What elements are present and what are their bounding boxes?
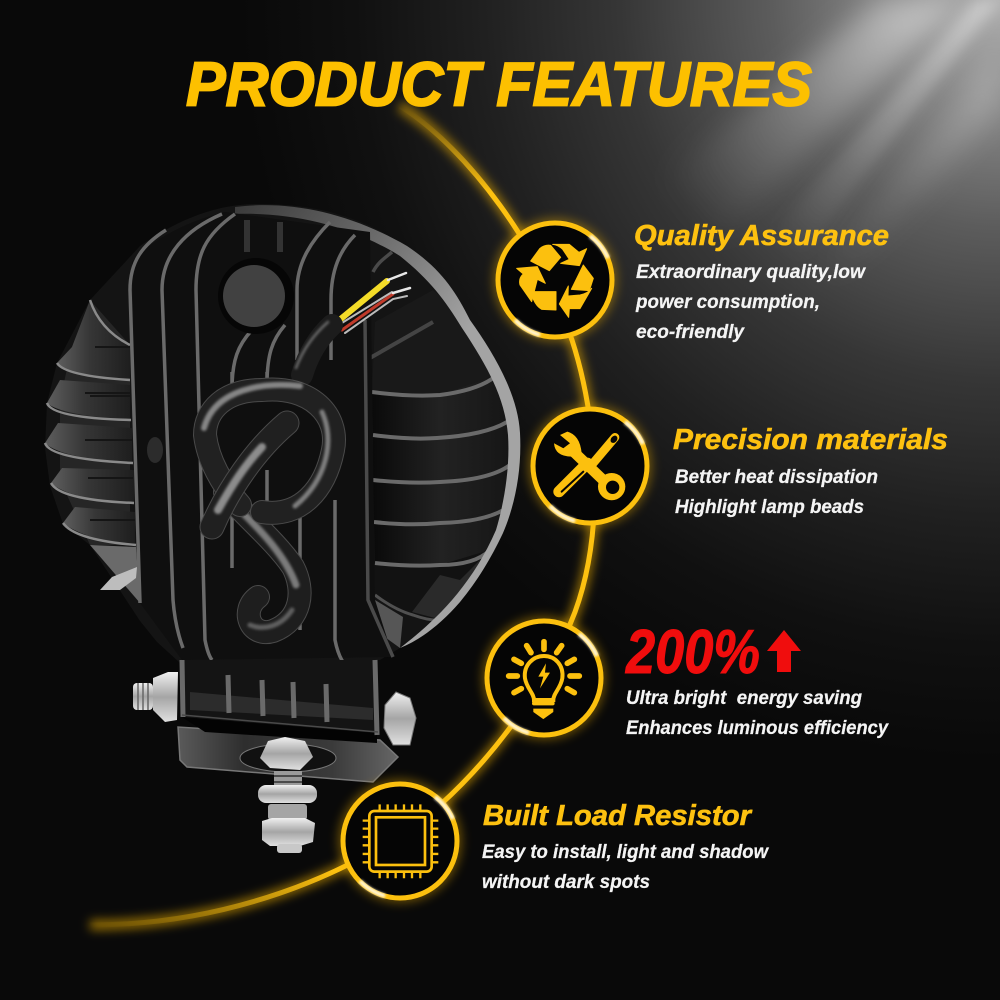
main loop [204, 385, 334, 513]
bottom bolt [240, 737, 336, 853]
feature: built load resistor [338, 779, 769, 903]
description [675, 467, 878, 518]
cable knot [204, 322, 334, 632]
description: Highlight lamp beads [675, 497, 864, 518]
side bolts [133, 672, 416, 745]
icon: tools [528, 404, 652, 528]
icon: light bulb [482, 616, 606, 740]
description: Enhances luminous efficiency [626, 718, 889, 739]
description [635, 262, 866, 343]
feature: precision materials [528, 404, 948, 528]
cable lead [302, 325, 332, 375]
centre housing ribs [130, 212, 393, 670]
lamp body silhouette [45, 204, 520, 663]
left cooling fins [45, 300, 140, 603]
lamp product image [45, 204, 520, 853]
description: eco-friendly [636, 322, 745, 343]
feature: brightness [482, 616, 889, 740]
200% figure: 200% [625, 618, 760, 687]
description [482, 842, 769, 893]
lamp rim highlight [235, 205, 520, 648]
description: power consumption, [635, 292, 820, 313]
right cooling fins [370, 290, 510, 648]
description: Easy to install, light and shadow [482, 842, 769, 863]
heading: Precision materials [673, 424, 948, 456]
bracket upper section [182, 660, 380, 735]
heading: Quality Assurance [634, 220, 889, 252]
side stud [147, 437, 163, 463]
icon: chip [338, 779, 462, 903]
icon: up arrow [767, 630, 801, 672]
description: Ultra bright energy saving [626, 688, 862, 709]
crossing strand [212, 423, 287, 527]
icon: recycle [493, 218, 617, 342]
sensor disc [218, 258, 294, 334]
description: without dark spots [482, 872, 650, 893]
lower S strand [225, 492, 300, 632]
description [626, 688, 889, 739]
title: PRODUCT FEATURES [186, 50, 812, 120]
description: Better heat dissipation [675, 467, 878, 488]
bracket plate [178, 727, 398, 782]
light rays [650, 0, 1000, 290]
wires [337, 273, 410, 333]
description: Extraordinary quality,low [636, 262, 866, 283]
heading: Built Load Resistor [483, 800, 753, 832]
feature: quality assurance [493, 218, 889, 343]
yellow arc connecting features [90, 106, 595, 925]
mounting bracket [178, 660, 398, 782]
